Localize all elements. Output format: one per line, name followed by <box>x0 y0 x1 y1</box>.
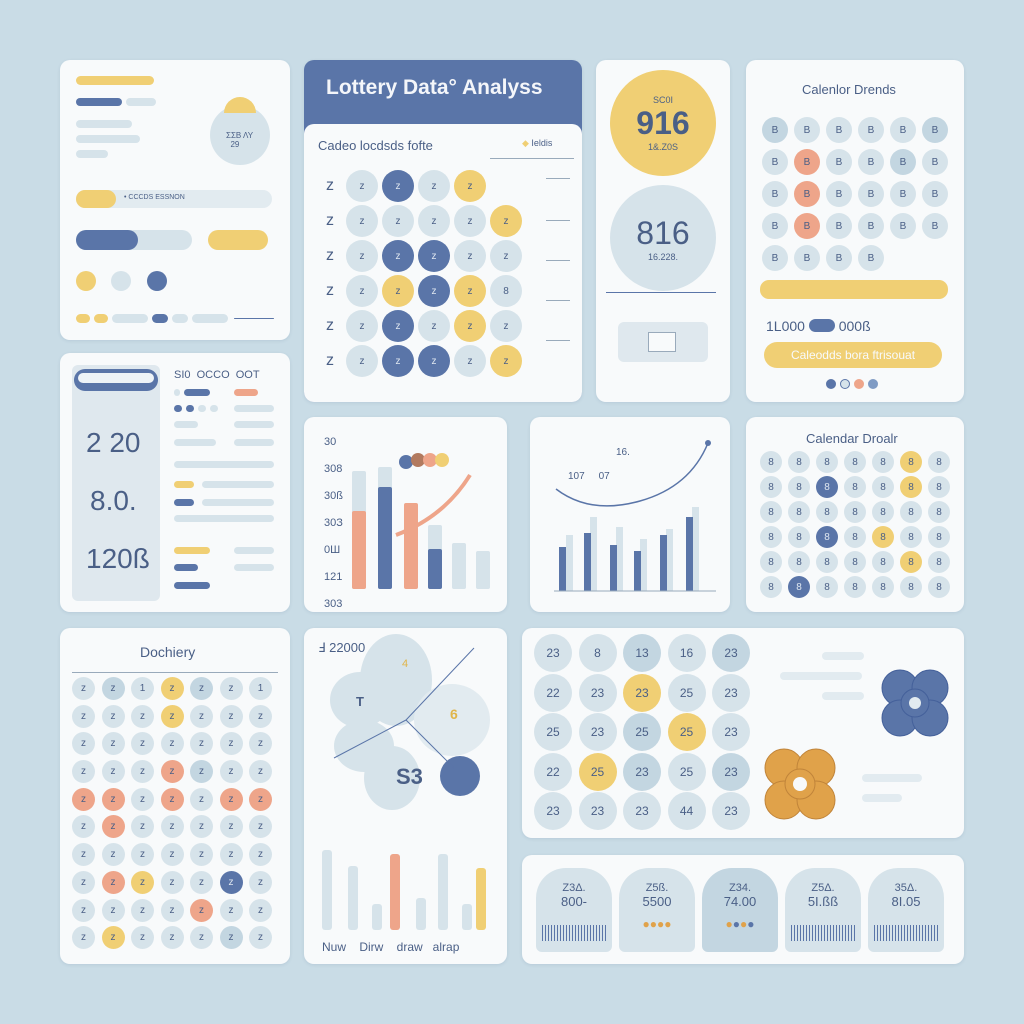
title: Lottery Data° Analyss <box>326 76 543 99</box>
panel: number grid with clovers: 23 <box>591 804 604 818</box>
panel: calendar droalr: 8 <box>936 456 942 468</box>
panel: flower chart <box>304 628 507 964</box>
panel: dochiery: z <box>199 738 204 749</box>
number grid: z <box>360 250 364 262</box>
number grid <box>326 170 522 377</box>
panel: top-left controls: • CCCDS ESSNON <box>124 194 185 201</box>
panel: number grid with clovers: 25 <box>680 686 693 700</box>
panel: number grid with clovers: 25 <box>680 725 693 739</box>
panel: big numbers: 16.228. <box>648 252 678 262</box>
panel: calendar droalr: 8 <box>768 556 774 568</box>
panel: dochiery: z <box>170 932 174 943</box>
panel: calendar brends: B <box>772 156 778 168</box>
panel: calendar droalr: 8 <box>936 556 942 568</box>
panel: flower chart: 4 <box>402 658 408 670</box>
bars <box>352 471 366 589</box>
panel: calendar droalr: 8 <box>852 582 858 592</box>
panel: dochiery: z <box>199 766 204 777</box>
number grid: z <box>326 247 334 264</box>
panel: number grid with clovers: 23 <box>635 764 649 778</box>
panel: dochiery: z <box>258 932 263 943</box>
panel: dochiery <box>60 628 290 964</box>
panel: calendar brends: B <box>900 124 906 136</box>
panel: bar chart: 30З <box>324 517 343 529</box>
panel: number grid with clovers: 23 <box>635 686 649 700</box>
panel: calendar brends: B <box>804 220 810 232</box>
panel: dochiery: z <box>228 711 234 722</box>
panel: big numbers: 1&.Z0S <box>648 142 678 152</box>
panel: stats list: 120ß <box>86 543 150 574</box>
panel: calendar droalr: 8 <box>824 456 830 468</box>
panel: dochiery: z <box>258 738 263 749</box>
panel: big numbers: 916 <box>636 104 690 140</box>
panel: calendar brends: B <box>804 188 810 200</box>
number grid: z <box>360 216 364 226</box>
panel: dochiery: z <box>170 877 174 888</box>
panel: dochiery: z <box>199 904 204 916</box>
panel: calendar brends: B <box>868 156 874 168</box>
panel: calendar droalr: 8 <box>824 532 830 542</box>
panel: big numbers: SC0I <box>653 94 673 104</box>
panel: dochiery: z <box>228 766 234 777</box>
panel: dochiery: z <box>140 794 145 805</box>
panel: ticket cards: 35Δ. <box>895 882 917 894</box>
panel: calendar droalr: 8 <box>936 506 942 518</box>
panel: stats list <box>60 353 290 612</box>
icon: badge: ΣΣΒ ΛΥ <box>226 131 253 140</box>
panel: calendar droalr: 8 <box>908 582 914 592</box>
panel: calendar droalr: 8 <box>852 556 858 568</box>
panel: lottery data analysis <box>304 60 582 402</box>
panel: dochiery: z <box>199 849 204 860</box>
panel: calendar brends: Calenlor Drends <box>802 82 896 97</box>
panel: calendar droalr: 8 <box>936 482 942 492</box>
panel: dochiery: z <box>81 711 86 722</box>
number grid: 8 <box>503 286 509 296</box>
icon: illustration <box>618 322 708 362</box>
panel: dochiery: z <box>81 849 86 860</box>
panel: dochiery: z <box>81 932 86 943</box>
number grid: z <box>468 286 472 296</box>
panel: calendar droalr: 8 <box>768 582 774 592</box>
number grid: z <box>396 250 400 262</box>
number grid: z <box>396 356 400 366</box>
panel: bar chart: 0Ш <box>324 544 340 556</box>
panel: calendar brends: B <box>900 156 906 168</box>
panel: number grid with clovers: 23 <box>591 725 604 739</box>
icon: orange clover <box>764 748 836 820</box>
panel: dochiery: z <box>140 904 145 916</box>
panel: calendar brends: B <box>772 220 778 232</box>
panel: dochiery: z <box>199 932 204 943</box>
panel: ticket cards: 8Ι.05 <box>892 894 920 909</box>
panel: dochiery: z <box>110 877 116 888</box>
panel: lottery data analysis: ◆ Ieldis <box>522 138 552 148</box>
bar chart <box>322 850 332 930</box>
panel: number grid with clovers: 22 <box>546 764 560 778</box>
panel: dochiery: z <box>81 821 86 832</box>
panel: number grid with clovers: 23 <box>591 686 604 700</box>
number grid: z <box>504 250 508 262</box>
panel: calendar droalr: 8 <box>880 456 886 468</box>
panel: flower chart: Ⅎ 22000 <box>318 640 365 655</box>
panel: calendar droalr: 8 <box>880 506 886 518</box>
panel: calendar brends: B <box>836 188 842 200</box>
panel: dochiery: z <box>110 683 116 694</box>
panel: dochiery: z <box>81 766 86 777</box>
panel: ticket cards: ●●●● <box>726 917 754 931</box>
number grid: z <box>326 317 334 334</box>
panel: bar chart: 121 <box>324 571 342 583</box>
panel: ticket cards: Z34. <box>729 882 751 894</box>
panel: dochiery: z <box>81 877 86 888</box>
panel: dochiery: 1 <box>140 683 145 694</box>
panel: top-left controls <box>60 60 290 340</box>
panel: calendar droalr: 8 <box>852 532 858 542</box>
panel: number grid with clovers: 25 <box>680 764 693 778</box>
panel: dochiery: z <box>199 877 204 888</box>
panel: dochiery: z <box>228 932 234 943</box>
panel: dochiery: z <box>170 738 174 749</box>
number grid: z <box>396 180 400 192</box>
panel: dochiery: z <box>110 821 116 832</box>
panel: ticket cards: Z3Δ. <box>562 882 586 894</box>
panel: dochiery: z <box>170 904 174 916</box>
panel: calendar droalr: 8 <box>796 456 802 468</box>
panel: line chart <box>530 417 730 612</box>
panel: dochiery: z <box>228 877 234 888</box>
panel: calendar droalr: 8 <box>824 506 830 518</box>
panel: dochiery: z <box>140 711 145 722</box>
panel: dochiery: z <box>110 766 116 777</box>
panel: number grid with clovers: 23 <box>724 804 738 818</box>
panel: stats list: SI0 OCCO OOT <box>174 369 260 381</box>
panel: calendar droalr: 8 <box>852 456 858 468</box>
panel: flower chart: S3 <box>396 764 423 789</box>
panel: calendar droalr: 8 <box>908 456 914 468</box>
panel: big numbers <box>596 60 730 402</box>
panel: number grid with clovers: 23 <box>546 646 560 660</box>
panel: calendar brends: 1L000 000ß <box>766 318 871 334</box>
panel: calendar droalr <box>746 417 964 612</box>
panel: calendar droalr: 8 <box>796 506 802 518</box>
panel: dochiery: z <box>140 932 145 943</box>
panel: dochiery: z <box>258 849 263 860</box>
panel: calendar brends: B <box>932 124 938 136</box>
panel: calendar droalr: 8 <box>796 582 802 592</box>
panel: calendar droalr: 8 <box>880 556 886 568</box>
panel: dochiery: z <box>110 738 116 749</box>
panel: calendar brends: B <box>900 220 906 232</box>
number grid: z <box>326 352 334 369</box>
panel: ticket cards: ●●●● <box>642 917 672 931</box>
panel: calendar brends: Caleodds bora ftrisouat <box>791 348 915 362</box>
panel: calendar brends: B <box>836 252 842 264</box>
panel: dochiery: z <box>140 821 145 832</box>
panel: bar chart: 303 <box>324 598 342 610</box>
panel: calendar droalr: 8 <box>824 556 830 568</box>
panel: calendar brends: B <box>900 188 906 200</box>
panel: calendar brends: B <box>772 252 778 264</box>
number grid: z <box>326 177 334 194</box>
panel: calendar droalr: 8 <box>880 532 886 542</box>
panel: dochiery: z <box>140 766 145 777</box>
panel: ticket cards: Z5ß. <box>646 882 668 894</box>
panel: dochiery: z <box>228 821 234 832</box>
panel: lottery data analysis: Cadeo locdsds fofte <box>318 138 433 153</box>
panel: calendar brends: B <box>836 156 842 168</box>
panel: dochiery: Dochiery <box>140 644 195 660</box>
panel: dochiery: z <box>199 794 204 805</box>
panel: dochiery: z <box>140 738 145 749</box>
number grid: z <box>468 216 472 226</box>
panel: calendar brends: B <box>804 124 810 136</box>
panel: number grid with clovers: 8 <box>594 646 601 660</box>
panel: ticket cards: 5500 <box>643 894 671 909</box>
panel: dochiery: z <box>228 904 234 916</box>
panel: calendar droalr: 8 <box>768 482 774 492</box>
panel: dochiery: z <box>81 904 86 916</box>
panel: calendar droalr: 8 <box>852 482 858 492</box>
number grid: z <box>468 250 472 262</box>
icon: badge: 29 <box>230 140 239 149</box>
panel: dochiery: z <box>81 794 86 805</box>
panel: calendar droalr: 8 <box>908 506 914 518</box>
panel: calendar brends: B <box>804 252 810 264</box>
panel: calendar droalr: 8 <box>908 532 914 542</box>
number grid: z <box>396 216 400 226</box>
number grid: z <box>504 216 508 226</box>
panel: dochiery: z <box>140 849 145 860</box>
number grid: z <box>360 286 364 296</box>
panel: calendar brends: B <box>772 188 778 200</box>
panel: line chart: 107 07 <box>568 471 610 482</box>
panel: dochiery: z <box>170 711 174 722</box>
panel: big numbers: 816 <box>636 214 690 250</box>
panel: dochiery: z <box>170 849 174 860</box>
number grid: z <box>432 180 436 192</box>
panel: calendar droalr: 8 <box>768 532 774 542</box>
panel: calendar brends: B <box>836 220 842 232</box>
number grid: z <box>432 356 436 366</box>
panel: calendar droalr: 8 <box>824 482 830 492</box>
panel: calendar droalr: 8 <box>880 482 886 492</box>
panel: calendar droalr: 8 <box>796 482 802 492</box>
panel: calendar droalr: 8 <box>796 532 802 542</box>
number grid: z <box>396 320 400 332</box>
number grid: z <box>468 180 472 192</box>
panel: number grid with clovers: 25 <box>591 764 604 778</box>
panel: calendar droalr: 8 <box>936 532 942 542</box>
panel: calendar brends: B <box>868 220 874 232</box>
panel: dochiery: z <box>258 794 263 805</box>
panel: calendar brends: B <box>836 124 842 136</box>
panel: calendar droalr: 8 <box>908 482 914 492</box>
panel: calendar droalr: 8 <box>768 456 774 468</box>
panel: calendar brends: B <box>868 124 874 136</box>
panel: dochiery: z <box>258 766 263 777</box>
panel: flower chart: Nuw Dirw draw alrap <box>322 940 459 954</box>
panel: number grid with clovers: 23 <box>724 764 738 778</box>
number grid: z <box>504 320 508 332</box>
panel: calendar brends: B <box>804 156 810 168</box>
panel: ticket cards: Z5Δ. <box>811 882 835 894</box>
panel: dochiery: z <box>110 711 116 722</box>
number grid: z <box>504 356 508 366</box>
panel: number grid with clovers: 13 <box>635 646 649 660</box>
panel: bar chart: 30 <box>324 436 336 448</box>
number grid: z <box>432 320 436 332</box>
panel: dochiery: z <box>110 849 116 860</box>
panel: ticket cards: 5Ι.ßß <box>808 894 838 909</box>
number grid: z <box>468 356 472 366</box>
panel: calendar droalr: Calendar Droalr <box>806 431 898 446</box>
panel: flower chart: 6 <box>450 706 458 722</box>
panel: dochiery: z <box>258 904 263 916</box>
panel: calendar brends: B <box>932 156 938 168</box>
number grid: z <box>360 320 364 332</box>
panel: dochiery: z <box>228 849 234 860</box>
panel: dochiery: 1 <box>258 683 263 694</box>
panel: dochiery: z <box>81 683 86 694</box>
panel: number grid with clovers <box>522 628 964 838</box>
panel: bar chart: 30ß <box>324 490 343 502</box>
panel: dochiery: z <box>170 766 174 777</box>
panel: dochiery: z <box>110 904 116 916</box>
panel: ticket cards: 74.00 <box>724 894 756 909</box>
panel: calendar brends: B <box>772 124 778 136</box>
panel: calendar brends: B <box>868 252 874 264</box>
number grid: z <box>432 250 436 262</box>
panel: calendar brends: B <box>868 188 874 200</box>
panel: stats list: 2 20 <box>86 427 140 458</box>
panel: calendar droalr: 8 <box>796 556 802 568</box>
panel: ticket cards: 800- <box>561 894 587 909</box>
panel: line chart: 16. <box>616 447 630 458</box>
number grid: z <box>468 320 472 332</box>
number grid: z <box>432 286 436 296</box>
panel: number grid with clovers: 22 <box>546 686 560 700</box>
panel: dochiery: z <box>199 821 204 832</box>
panel: dochiery: z <box>170 683 174 694</box>
panel: dochiery: z <box>228 738 234 749</box>
panel: stats list: 8.0. <box>90 485 137 516</box>
panel: flower chart: T <box>356 694 364 709</box>
panel: dochiery: z <box>199 683 204 694</box>
panel: dochiery: z <box>170 821 174 832</box>
panel: dochiery: z <box>258 877 263 888</box>
panel: calendar brends: B <box>932 220 938 232</box>
panel: dochiery: z <box>258 711 263 722</box>
panel: number grid with clovers: 25 <box>546 725 560 739</box>
panel: calendar brends: B <box>932 188 938 200</box>
panel: calendar brends <box>746 60 964 402</box>
panel: dochiery: z <box>228 683 234 694</box>
panel: number grid with clovers: 23 <box>724 725 738 739</box>
number grid: z <box>396 286 400 296</box>
panel: bar chart: 308 <box>324 463 342 475</box>
panel: dochiery: z <box>170 794 174 805</box>
panel: dochiery: z <box>110 932 116 943</box>
number grid: z <box>360 356 364 366</box>
panel: ticket cards <box>522 855 964 964</box>
panel: number grid with clovers: 44 <box>680 804 693 818</box>
panel: number grid with clovers: 23 <box>724 646 738 660</box>
panel: dochiery: z <box>228 794 234 805</box>
icon: blue clover <box>882 670 948 736</box>
panel: dochiery: z <box>81 738 86 749</box>
panel: number grid with clovers: 23 <box>635 804 649 818</box>
panel: calendar droalr: 8 <box>768 506 774 518</box>
list rows <box>174 389 274 589</box>
panel: calendar droalr: 8 <box>908 556 914 568</box>
panel: calendar droalr: 8 <box>824 582 830 592</box>
panel: dochiery: z <box>199 711 204 722</box>
panel: number grid with clovers: 23 <box>724 686 738 700</box>
panel: number grid with clovers: 23 <box>546 804 560 818</box>
icon: badge <box>210 105 270 165</box>
number grid: z <box>326 212 334 229</box>
number grid: z <box>360 180 364 192</box>
number grid: z <box>326 282 334 299</box>
panel: dochiery: z <box>258 821 263 832</box>
panel: dochiery: z <box>110 794 116 805</box>
panel: calendar droalr: 8 <box>880 582 886 592</box>
panel: calendar droalr: 8 <box>852 506 858 518</box>
panel: bar chart <box>304 417 507 612</box>
panel: dochiery: z <box>140 877 145 888</box>
number grid: z <box>432 216 436 226</box>
panel: calendar droalr: 8 <box>936 582 942 592</box>
panel: number grid with clovers: 25 <box>635 725 649 739</box>
panel: number grid with clovers: 16 <box>680 646 693 660</box>
